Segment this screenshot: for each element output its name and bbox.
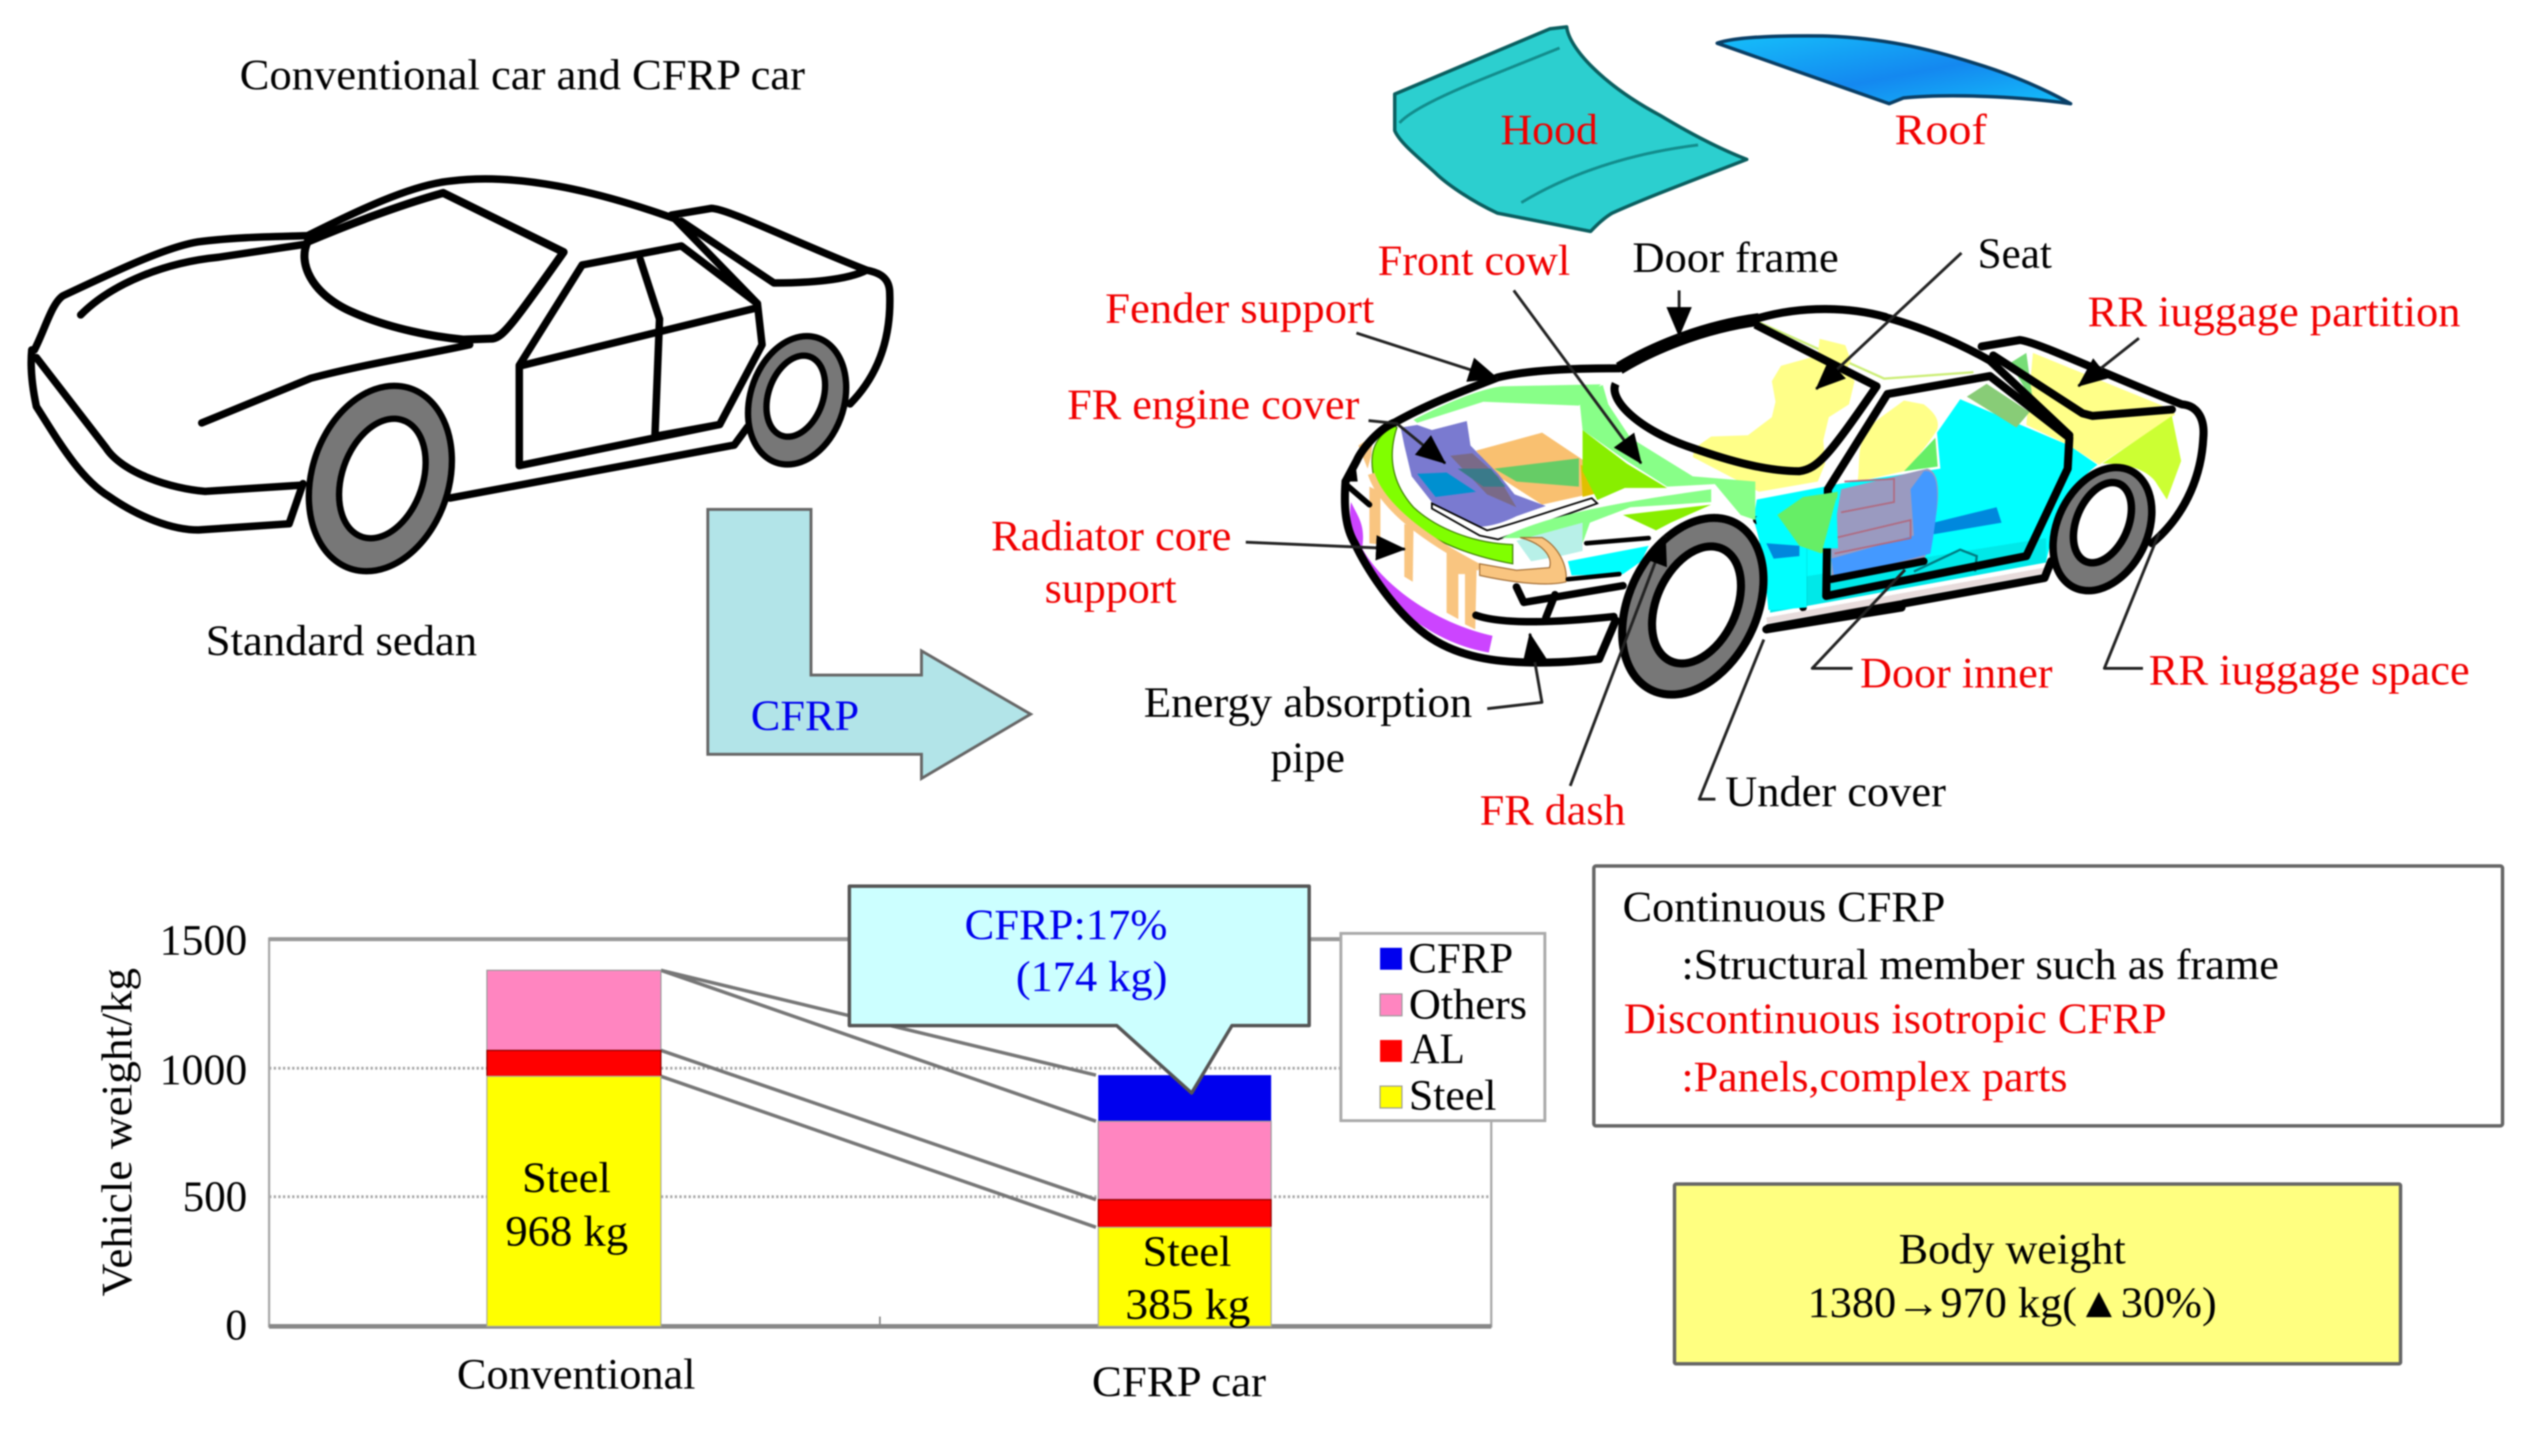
front section of car	[1343, 319, 1902, 705]
legend: Others	[1409, 981, 1527, 1028]
callout: CFRP share: (174 kg)	[1016, 953, 1167, 1001]
panel: body weight: Body weight	[1899, 1226, 2126, 1273]
car part labels: RR iuggage partition	[2088, 288, 2460, 336]
car part labels: Door frame	[1632, 234, 1839, 282]
car part labels: Energy absorption	[1144, 679, 1472, 727]
icon: front wheel of CFRP car	[1600, 508, 1786, 705]
car part labels: Radiator core	[991, 512, 1231, 560]
car part labels	[991, 230, 2470, 834]
y axis labels: 0	[225, 1302, 247, 1349]
series connector lines	[661, 970, 1096, 1227]
car part labels: RR iuggage space	[2149, 646, 2470, 694]
y axis labels: 1500	[160, 917, 247, 965]
rear section of car	[1753, 317, 2203, 628]
x axis labels	[457, 1351, 1266, 1406]
callout: CFRP share	[849, 886, 1309, 1093]
y axis title: Vehicle weight/kg	[93, 968, 141, 1296]
plot frame	[269, 939, 1491, 1326]
panel: CFRP types: :Structural member such as frame	[1681, 941, 2279, 989]
arrow: CFRP conversion	[708, 509, 1031, 778]
bar: conventional	[487, 970, 661, 1326]
windshield outline	[1615, 324, 1877, 471]
callout: CFRP share: CFRP:17%	[965, 901, 1167, 949]
car part labels: support	[1045, 565, 1177, 612]
car part labels: Front cowl	[1378, 237, 1570, 285]
roof line joining front and rear	[1759, 309, 1885, 318]
arrow: CFRP conversion: CFRP	[751, 692, 859, 740]
leader arrows	[1246, 253, 2159, 799]
bar chart: vehicle weight	[93, 886, 1545, 1406]
car part labels: FR dash	[1480, 786, 1626, 834]
panel: CFRP types: Continuous CFRP	[1623, 883, 1945, 931]
y axis labels	[160, 917, 247, 1349]
x axis labels: CFRP car	[1092, 1358, 1266, 1406]
illustration: standard sedan line drawing	[31, 179, 890, 580]
car part labels: FR engine cover	[1067, 381, 1359, 429]
panel: body weight: 1380→970 kg(▲30%)	[1808, 1279, 2217, 1327]
car part labels: Under cover	[1725, 768, 1946, 816]
title: Conventional car and CFRP car	[240, 51, 805, 99]
legend	[1341, 933, 1545, 1121]
car part labels: Fender support	[1105, 285, 1374, 332]
panel: CFRP types: Discontinuous isotropic CFRP	[1624, 995, 2167, 1043]
bar: CFRP car	[1098, 1075, 1271, 1329]
y axis labels: 500	[183, 1173, 247, 1221]
panel: body weight	[1674, 1184, 2401, 1364]
bar: CFRP car: 385 kg	[1125, 1281, 1250, 1329]
icon: rear wheel	[736, 330, 859, 471]
panel: CFRP types	[1594, 866, 2503, 1126]
car part labels: pipe	[1271, 734, 1345, 782]
label: roof: Roof	[1895, 106, 1987, 154]
label: hood: Hood	[1500, 106, 1598, 154]
icon: front wheel	[291, 377, 470, 580]
car part labels: Door inner	[1860, 649, 2052, 697]
bar: CFRP car: Steel	[1143, 1228, 1231, 1276]
illustration: CFRP car cutaway	[1343, 309, 2203, 705]
y axis labels: 1000	[160, 1046, 247, 1094]
label: standard sedan: Standard sedan	[206, 617, 477, 665]
panel: CFRP types: :Panels,complex parts	[1681, 1053, 2067, 1101]
bar: conventional: Steel	[522, 1154, 611, 1202]
panel: hood part	[1394, 27, 1747, 232]
panel: roof part	[1717, 36, 2071, 104]
legend: AL	[1410, 1025, 1465, 1073]
car part labels: Seat	[1978, 230, 2052, 278]
icon: rear wheel of CFRP car	[2037, 459, 2168, 599]
x axis labels: Conventional	[457, 1351, 695, 1398]
legend: CFRP	[1408, 935, 1513, 982]
legend: Steel	[1409, 1072, 1496, 1120]
bar: conventional: 968 kg	[505, 1208, 628, 1255]
